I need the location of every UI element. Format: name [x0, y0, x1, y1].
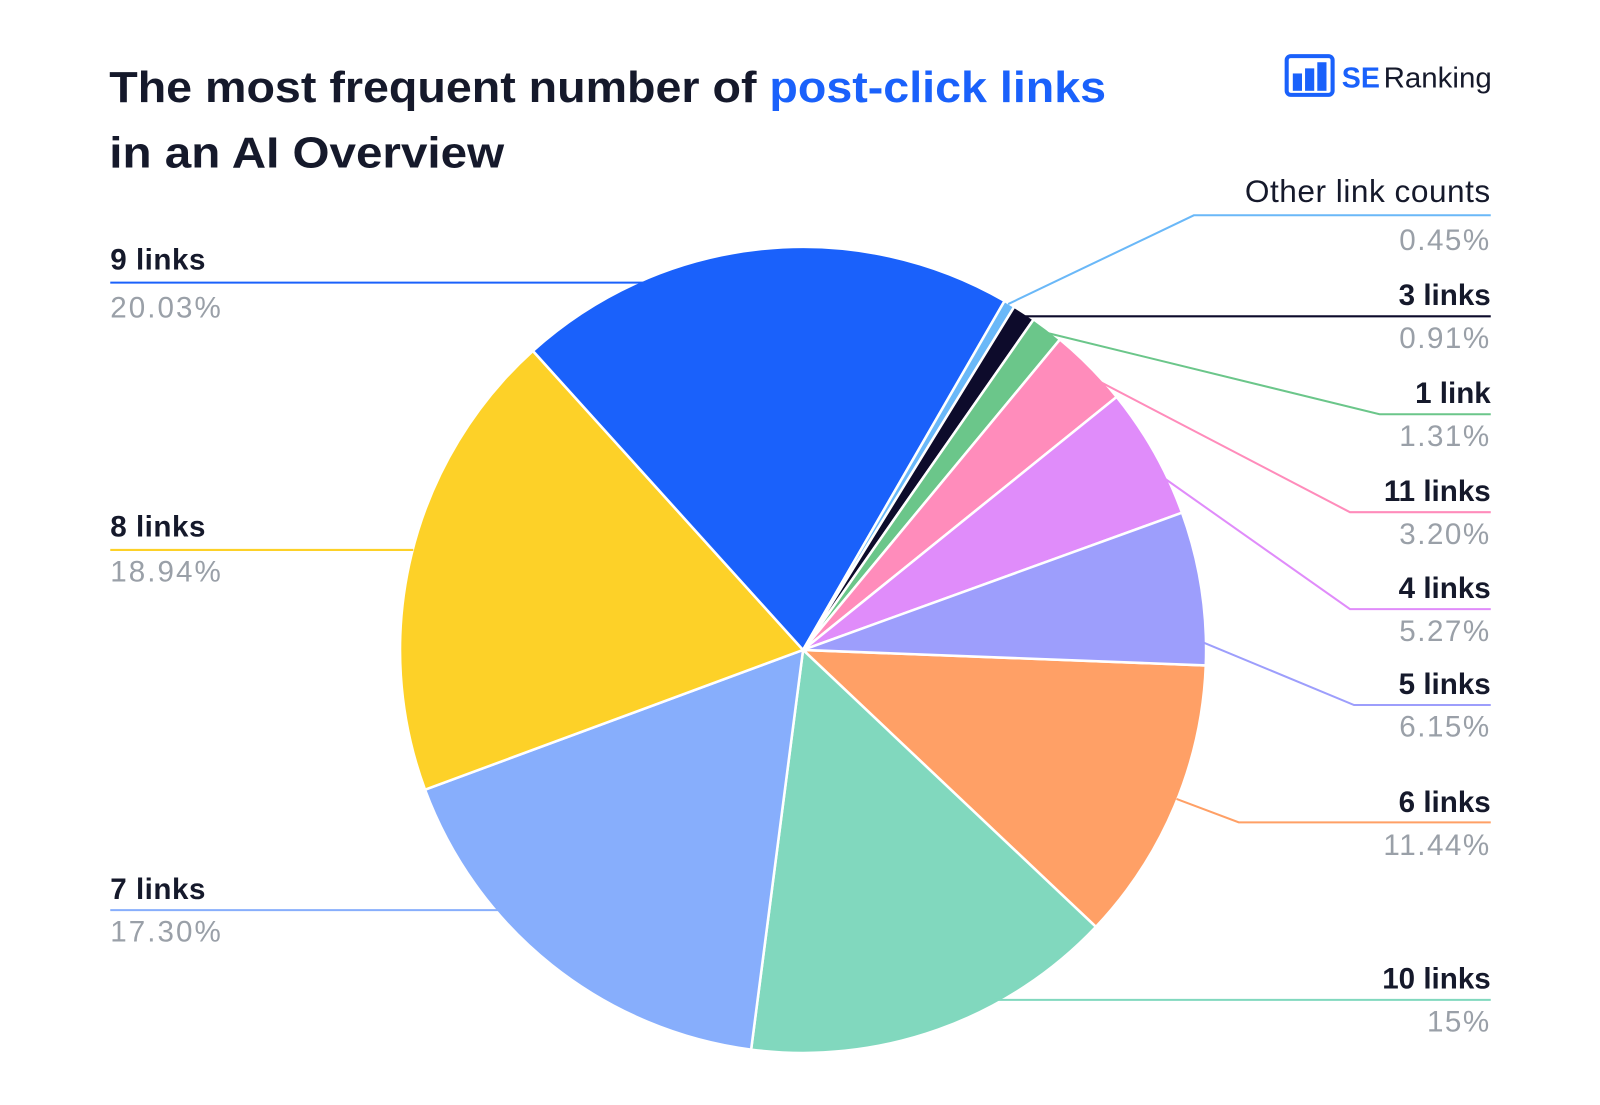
label: 4 links: 4 links	[1399, 572, 1491, 605]
label: 9 links: 20.03%	[110, 291, 223, 324]
label: 5 links: 6.15%	[1399, 711, 1491, 744]
label: 8 links	[110, 511, 223, 589]
label: 10 links: 10 links	[1382, 963, 1491, 996]
label: 5 links: 5 links	[1399, 668, 1491, 701]
slice: other	[803, 301, 1014, 650]
title: The most frequent number of post-click links	[109, 63, 1106, 112]
label: other: Other link counts	[1245, 173, 1491, 209]
label: 8 links: 18.94%	[110, 556, 223, 589]
label: 1 link: 1 link	[1415, 377, 1491, 410]
label: 11 links: 11 links	[1384, 475, 1491, 508]
label: other	[1245, 173, 1491, 257]
slice: 4 links	[803, 397, 1182, 650]
left labels	[110, 243, 223, 949]
label: other: 0.45%	[1399, 224, 1491, 257]
label: 9 links: 9 links	[110, 243, 206, 276]
label: 7 links: 7 links	[110, 873, 206, 906]
label: 3 links	[1399, 279, 1491, 355]
slice: 1 link	[803, 319, 1060, 650]
label: 3 links: 0.91%	[1399, 322, 1491, 355]
label: 7 links	[110, 873, 223, 949]
label: 1 link: 1.31%	[1399, 420, 1491, 453]
label: 1 link	[1399, 377, 1491, 453]
label: 10 links: 15%	[1427, 1006, 1491, 1039]
slice: 11 links	[803, 339, 1117, 650]
slice: 10 links	[751, 650, 1096, 1053]
slice: 3 links	[803, 307, 1034, 650]
label: 6 links: 6 links	[1399, 786, 1491, 819]
right labels	[1245, 173, 1491, 1039]
title: in an AI Overview	[109, 128, 505, 177]
label: 6 links: 11.44%	[1383, 829, 1491, 862]
slice: 6 links	[803, 650, 1206, 927]
label: 4 links	[1399, 572, 1491, 648]
logo: SE Ranking: SE	[1342, 63, 1380, 95]
label: 8 links: 8 links	[110, 511, 206, 544]
label: 7 links: 17.30%	[110, 916, 223, 949]
label: 3 links: 3 links	[1399, 279, 1491, 312]
label: 10 links	[1382, 963, 1491, 1039]
label: 5 links	[1399, 668, 1491, 744]
label: 4 links: 5.27%	[1399, 615, 1491, 648]
slice: 7 links	[425, 650, 803, 1050]
label: 11 links	[1384, 475, 1491, 551]
pie chart	[400, 247, 1206, 1053]
label: 6 links	[1383, 786, 1491, 862]
logo: SE Ranking	[1287, 56, 1492, 95]
title	[109, 63, 1106, 177]
slice: 5 links	[803, 513, 1206, 665]
logo: SE Ranking: Ranking	[1384, 63, 1492, 95]
slice: 9 links	[533, 247, 1005, 650]
label: 9 links	[110, 243, 223, 324]
leader lines	[110, 215, 1491, 1000]
label: 11 links: 3.20%	[1399, 518, 1491, 551]
slice: 8 links	[400, 351, 803, 790]
